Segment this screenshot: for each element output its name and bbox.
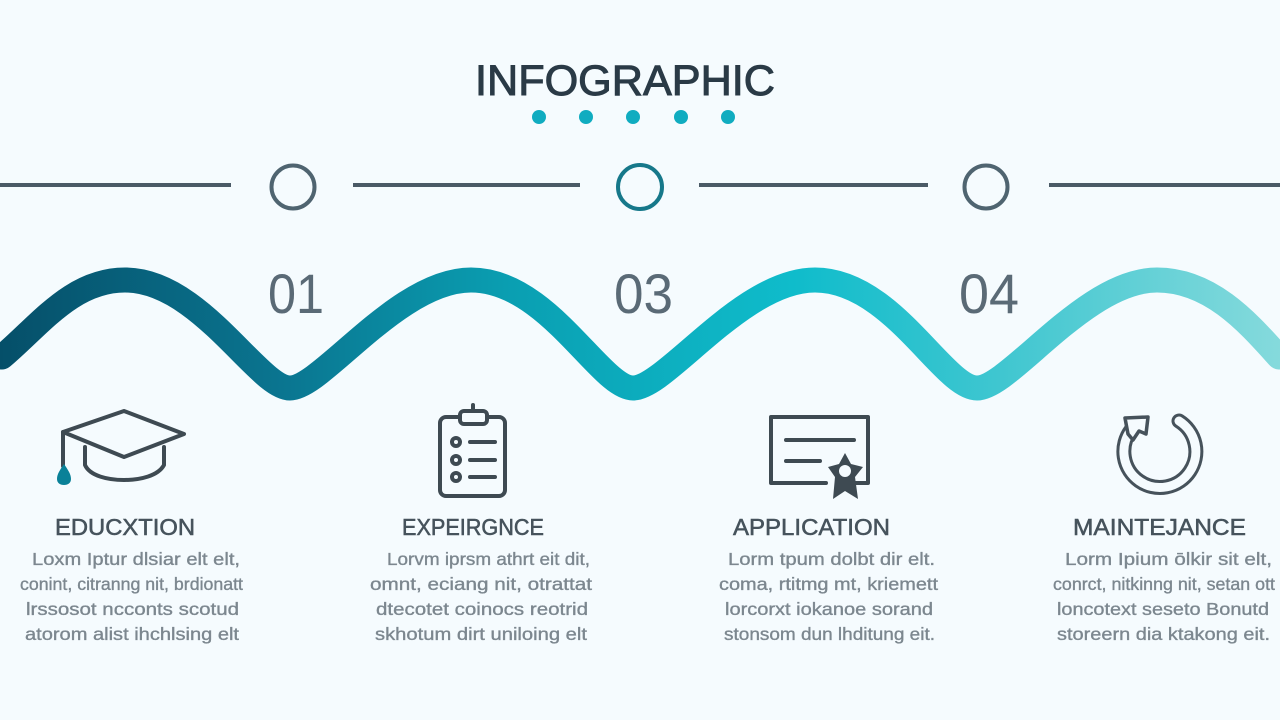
text block: application: lorcorxt iokanoe sorand	[725, 599, 933, 619]
heading: application: APPLICATION	[733, 514, 890, 540]
column: education	[20, 411, 243, 644]
top timeline with circles	[0, 165, 1280, 209]
column: experience	[370, 405, 592, 644]
text block: maintenance: storeern dia ktakong eit.	[1057, 624, 1270, 644]
step numbers	[268, 262, 1019, 325]
text block: experience	[370, 549, 592, 644]
text block: experience: omnt, eciang nit, otrattat	[370, 574, 592, 594]
icon: certificate	[771, 417, 868, 499]
text block: education: atorom alist ihchlsing elt	[25, 624, 239, 644]
text block: education: lrssosot ncconts scotud	[26, 599, 239, 619]
text block: education: Loxm Iptur dlsiar elt elt,	[32, 549, 240, 569]
text block: experience: skhotum dirt uniloing elt	[375, 624, 587, 644]
wave ribbon	[2, 280, 1279, 388]
text block: experience: dtecotet coinocs reotrid	[376, 599, 588, 619]
column: application	[719, 417, 938, 644]
text block: application	[719, 549, 938, 644]
icon: clipboard	[440, 405, 505, 496]
step numbers: 04	[959, 262, 1019, 325]
text block: maintenance: conrct, nitkinng nit, setan ott	[1053, 574, 1275, 594]
text block: education	[20, 549, 243, 644]
step numbers: 01	[268, 262, 324, 325]
icon: graduation cap	[57, 411, 184, 485]
text block: application: Lorm tpum dolbt dir elt.	[728, 549, 935, 569]
text block: education: conint, citranng nit, brdionatt	[20, 574, 243, 594]
heading: education: EDUCXTION	[55, 514, 195, 540]
text block: application: coma, rtitmg mt, kriemett	[719, 574, 938, 594]
text block: maintenance: Lorm Ipium ōlkir sit elt,	[1065, 549, 1272, 569]
step numbers: 03	[614, 262, 673, 325]
text block: experience: Lorvm iprsm athrt eit dit,	[387, 549, 590, 569]
heading: experience: EXPEIRGNCE	[402, 514, 544, 540]
text block: application: stonsom dun lhditung eit.	[724, 624, 935, 644]
title dots	[532, 110, 735, 124]
title: INFOGRAPHIC	[475, 57, 775, 105]
text block: maintenance: loncotext seseto Bonutd	[1057, 599, 1269, 619]
icon: refresh arrow	[1124, 417, 1196, 487]
text block: maintenance	[1053, 549, 1275, 644]
heading: maintenance: MAINTEJANCE	[1073, 514, 1246, 540]
column: maintenance	[1053, 417, 1275, 644]
